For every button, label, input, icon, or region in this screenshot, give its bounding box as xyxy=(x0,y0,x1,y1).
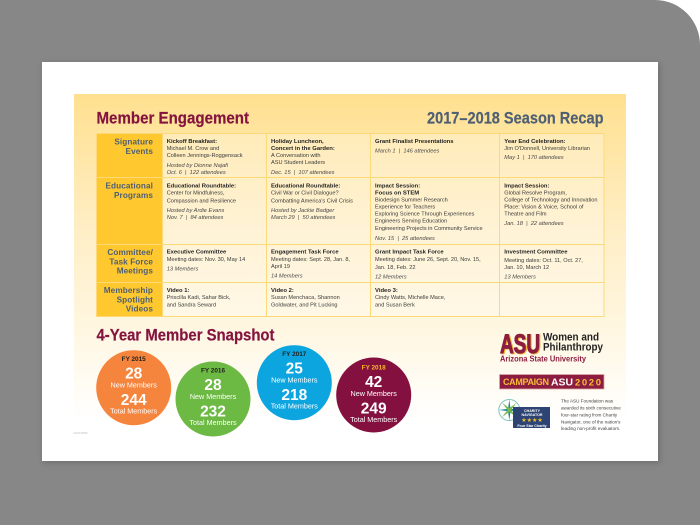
cell: Educational Roundtable, Mindfulness: Hosted by Ardie Evans xyxy=(167,208,224,214)
page: white sheet xyxy=(42,62,660,463)
badge: Charity Navigator: Four Star Charity xyxy=(517,424,547,428)
cell: Investment Committee: Meeting dates: Oct. 11, Oct. 27, xyxy=(504,258,583,264)
circle: FY 2018: New Members xyxy=(351,389,397,398)
panel: yellow gradient background xyxy=(74,94,626,420)
cell: Impact Session, Focus on STEM: Biodesign Summer Research xyxy=(375,197,448,203)
badge: Charity Navigator: NAVIGATOR xyxy=(522,413,543,417)
circle: FY 2015: New Members xyxy=(111,381,157,390)
cell: Engagement Task Force: April 19 xyxy=(271,264,290,270)
circle: FY 2017: 218 xyxy=(281,387,308,404)
text block: ASU Foundation note xyxy=(561,398,621,431)
cell: Video 1: Priscilla Kadi, Sahar Bick, xyxy=(167,295,231,301)
cell: Grant Finalist Presentations: March 1 | 146 attendees xyxy=(375,148,440,154)
row label: Educational Programs: Educational xyxy=(105,182,153,190)
cell: Impact Session, Global Resolve xyxy=(503,183,598,227)
logo: ASU Women and Philanthropy: ASU xyxy=(501,330,541,360)
cell: Investment Committee: Jan. 10, March 12 xyxy=(504,265,549,271)
cell: Year End Celebration xyxy=(504,139,590,161)
cell: Executive Committee: Meeting dates: Nov. 30, May 14 xyxy=(167,257,245,263)
badge: Campaign ASU 2020: CAMPAIGN xyxy=(503,377,549,387)
badge: Charity Navigator: CHARITY xyxy=(524,409,541,413)
logo: ASU Women and Philanthropy: Arizona State University xyxy=(500,354,586,364)
cell: Video 2 xyxy=(271,288,340,308)
cell: Engagement Task Force: Engagement Task Force xyxy=(271,250,339,256)
cell: Grant Impact Task Force: Jan. 18, Feb. 22 xyxy=(375,265,415,271)
row label: Committee / Task Force Meetings xyxy=(107,248,154,276)
circle: FY 2015: 28 xyxy=(125,366,143,383)
circle: FY 2015: FY 2015 xyxy=(122,356,146,363)
circle: FY 2015 xyxy=(96,350,171,425)
cell: Holiday Luncheon: Dec. 15 | 107 attendees xyxy=(271,170,335,176)
circle: FY 2018: 42 xyxy=(365,374,382,391)
cell: Grant Impact Task Force xyxy=(375,250,481,280)
cell: Video 1: Video 1: xyxy=(167,288,190,294)
cell: Impact Session, Focus on STEM: Focus on STEM xyxy=(375,190,419,196)
row label: Committee / Task Force Meetings: Task Force xyxy=(109,258,153,266)
cell: Kickoff Breakfast: Colleen Jennings-Roggensack xyxy=(167,153,243,159)
logo: ASU Women and Philanthropy: Philanthropy xyxy=(543,342,604,354)
row label: Signature Events: Signature xyxy=(114,138,153,146)
text block: ASU Foundation note: four-star rating from Charity xyxy=(561,412,618,418)
cell: Kickoff Breakfast: Hosted by Dionne Najafi xyxy=(167,163,229,169)
cell: Executive Committee xyxy=(167,250,245,272)
cell: Grant Impact Task Force: Meeting dates: June 26, Sept. 20, Nov. 15, xyxy=(375,257,481,263)
cell: Impact Session, Focus on STEM: Impact Session: xyxy=(375,183,420,189)
cell: Impact Session, Focus on STEM xyxy=(375,183,483,242)
cell: Grant Finalist Presentations xyxy=(375,139,454,154)
cell: Impact Session, Focus on STEM: Exploring Science Through Experiences xyxy=(375,212,475,218)
logo: ASU Women and Philanthropy: ASU xyxy=(500,329,540,359)
cell: Executive Committee: 13 Members xyxy=(167,266,198,272)
heading: 4-Year Member Snapshot: 4-Year Member Snapshot xyxy=(96,326,275,344)
badge: Campaign ASU 2020 xyxy=(500,374,604,389)
cell: Investment Committee: Investment Committee xyxy=(504,250,568,256)
cell: Grant Finalist Presentations: Grant Finalist Presentations xyxy=(375,139,454,145)
cell: Engagement Task Force: Meeting dates: Sept. 28, Jan. 8, xyxy=(271,257,350,263)
circle: FY 2016: Total Members xyxy=(189,418,237,427)
circle: FY 2015: 244 xyxy=(121,392,147,409)
icon: compass rose xyxy=(499,400,520,420)
circle: FY 2016: 28 xyxy=(204,377,222,394)
cell: Video 1: and Sandra Seward xyxy=(167,302,216,308)
cell: Holiday Luncheon: Holiday Luncheon, xyxy=(271,139,324,145)
logo: ASU Women and Philanthropy xyxy=(500,329,604,364)
circle: FY 2016 xyxy=(176,362,250,436)
badge: Campaign ASU 2020: ASU xyxy=(551,376,573,388)
cell: Impact Session, Global Resolve: College of Technology and Innovation xyxy=(504,198,598,204)
cell: Educational Roundtable, Mindfulness: Educational Roundtable: xyxy=(167,183,236,189)
cell: Video 3: Cindy Watts, Michelle Mace, xyxy=(375,295,446,301)
cell: Grant Impact Task Force: 12 Members xyxy=(375,274,407,280)
cell: Engagement Task Force: 14 Members xyxy=(271,274,303,280)
cell: Video 1 xyxy=(167,288,231,308)
cell: Kickoff Breakfast xyxy=(167,139,243,176)
cell: Investment Committee: 13 Members xyxy=(504,274,536,280)
circle: FY 2016: New Members xyxy=(190,392,237,401)
row label: Membership Spotlight Videos: Videos xyxy=(126,304,153,314)
text block: ASU Foundation note: The ASU Foundation was xyxy=(561,398,614,404)
row label: Membership Spotlight Videos: Spotlight xyxy=(117,296,153,304)
circle: FY 2018 xyxy=(336,358,411,432)
cell: Impact Session, Focus on STEM: Engineers Serving Education xyxy=(375,218,447,224)
cell: Year End Celebration: Jim O'Donnell, University Librarian xyxy=(504,146,590,152)
circle: FY 2016: FY 2016 xyxy=(201,367,225,374)
label column xyxy=(96,133,162,316)
cell: Kickoff Breakfast: Michael M. Crow and xyxy=(167,146,219,152)
cell: Investment Committee xyxy=(504,250,583,280)
cell: Educational Roundtable, Mindfulness: Compassion and Resilience xyxy=(167,198,236,204)
table: season recap grid xyxy=(96,133,604,317)
cell: Educational Roundtable, Mindfulness xyxy=(167,183,236,221)
badge: Charity Navigator xyxy=(499,400,550,428)
cell: Educational Roundtable, Mindfulness: Center for Mindfulness, xyxy=(167,190,225,196)
cell: Educational Roundtable, Civil War: Combatting America's Civil Crisis xyxy=(271,198,353,204)
cell: Educational Roundtable, Civil War: Civil War or Civil Dialogue? xyxy=(271,190,339,196)
row label: Membership Spotlight Videos xyxy=(104,286,153,314)
cell: Video 2: Goldwater, and Pit Lucking xyxy=(271,302,338,308)
cell: Educational Roundtable, Civil War: March 29 | 50 attendees xyxy=(271,215,336,221)
cell: Impact Session, Global Resolve: Global Resolve Program, xyxy=(504,190,567,196)
row label: Committee / Task Force Meetings: Meetings xyxy=(117,266,153,276)
title: Member Engagement: Member Engagement xyxy=(96,108,249,128)
circle: FY 2017: Total Members xyxy=(271,402,318,411)
cell: Impact Session, Global Resolve: Jan. 18 | 22 attendees xyxy=(503,221,564,227)
badge: Charity Navigator: ★★★★ xyxy=(521,417,543,424)
cell: Year End Celebration: Year End Celebration: xyxy=(504,139,566,145)
cell: Impact Session, Focus on STEM: Engineering Projects in Community Service xyxy=(375,226,483,232)
cell: Holiday Luncheon: Concert in the Garden: xyxy=(271,146,335,152)
cell: Educational Roundtable, Civil War xyxy=(271,183,353,221)
circle: FY 2015: Total Members xyxy=(110,407,158,416)
cell: Video 2: Video 2: xyxy=(271,288,294,294)
row label: Educational Programs xyxy=(105,182,153,200)
text block: ASU Foundation note: awarded its sixth consecutive xyxy=(561,406,621,410)
cell: Grant Impact Task Force: Grant Impact Task Force xyxy=(375,250,444,256)
cell: Video 3: Video 3: xyxy=(375,288,398,294)
cell: Executive Committee: Executive Committee xyxy=(167,250,227,256)
row label: Signature Events: Events xyxy=(126,147,153,156)
badge: Campaign ASU 2020: 2020 xyxy=(575,378,601,388)
cell: Kickoff Breakfast: Kickoff Breakfast: xyxy=(167,139,217,145)
circle: FY 2016: 232 xyxy=(200,403,226,420)
cell: Video 3: and Susan Berk xyxy=(375,302,415,308)
row label: Membership Spotlight Videos: Membership xyxy=(104,286,153,295)
circle: FY 2018: Total Members xyxy=(350,415,398,424)
cell: Engagement Task Force xyxy=(271,250,350,280)
circle: FY 2018: 249 xyxy=(361,400,387,417)
circle: FY 2017 xyxy=(257,345,332,420)
circle: FY 2017: 25 xyxy=(286,361,303,378)
text block: ASU Foundation note: leading non-profit evaluators. xyxy=(561,426,620,431)
cell: Impact Session, Focus on STEM: Nov. 15 | 25 attendees xyxy=(375,236,435,242)
cell: Educational Roundtable, Civil War: Hosted by Jackie Badger xyxy=(271,208,335,214)
logo: ASU Women and Philanthropy: Women and xyxy=(543,332,599,344)
text block: ASU Foundation note: Navigator, one of the nation's xyxy=(561,420,621,424)
cell: Impact Session, Global Resolve: Place: Vision & Voice, School of xyxy=(504,204,584,210)
heading: 2017–2018 Season Recap: 2017–2018 Season Recap xyxy=(427,108,604,128)
circle: FY 2017: New Members xyxy=(271,376,318,385)
circle: FY 2018: FY 2018 xyxy=(362,364,386,371)
cell: Impact Session, Global Resolve: Impact Session: xyxy=(504,183,550,189)
footnote: job code: ASUF0056 xyxy=(73,431,88,435)
row label: Educational Programs: Programs xyxy=(114,191,153,200)
cell: Holiday Luncheon: A Conversation with xyxy=(271,153,320,159)
cell: Holiday Luncheon xyxy=(271,139,335,176)
cell: Year End Celebration: May 1 | 170 attendees xyxy=(504,155,564,161)
cell: Video 2: Susan Menchaca, Shannon xyxy=(271,295,340,301)
cell: Impact Session, Global Resolve: Theatre and Film xyxy=(504,212,547,218)
table body cells xyxy=(162,133,604,316)
cell: Educational Roundtable, Mindfulness: Nov. 7 | 84 attendees xyxy=(167,215,224,221)
cell: Impact Session, Focus on STEM: Experience for Teachers xyxy=(375,204,435,210)
circle: FY 2017: FY 2017 xyxy=(282,351,307,358)
cell: Video 3 xyxy=(375,288,446,308)
cell: Educational Roundtable, Civil War: Educational Roundtable: xyxy=(271,183,340,189)
row label: Committee / Task Force Meetings: Committee/ xyxy=(107,248,154,257)
row label: Signature Events xyxy=(114,138,153,156)
cell: Holiday Luncheon: ASU Student Leaders xyxy=(271,160,325,166)
cell: Kickoff Breakfast: Oct. 6 | 122 attendees xyxy=(167,170,226,176)
